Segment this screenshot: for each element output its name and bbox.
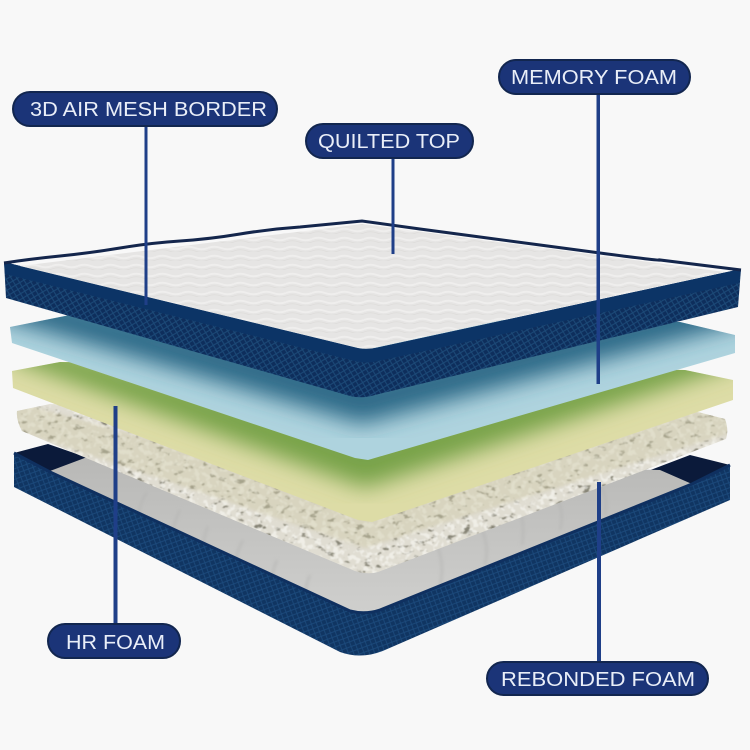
mesh side wall [14, 453, 730, 656]
leader line: memory foam [596, 93, 600, 384]
label: rebonded foam: REBONDED FOAM [501, 669, 695, 691]
back piping [4, 221, 741, 270]
rebonded foam layer [10, 400, 740, 580]
HR foam layer (green) [12, 362, 733, 522]
leader line: quilted top [392, 157, 394, 254]
quilted top mattress layer [4, 221, 741, 397]
quilted bottom panel [50, 456, 692, 612]
mesh side wall [4, 262, 741, 397]
bottom mattress cover [14, 444, 730, 656]
leader line: HR foam [114, 406, 118, 624]
memory foam layer (blue) [10, 316, 735, 460]
label: 3D air mesh border [13, 92, 277, 126]
quilted surface [20, 224, 725, 349]
olive speckled top band [10, 400, 740, 548]
interior black corners [14, 444, 100, 472]
leader line: 3D air mesh border [144, 125, 148, 305]
teal shadow [10, 316, 735, 438]
label: HR foam [48, 624, 180, 658]
label: rebonded foam [487, 662, 708, 695]
label: quilted top: QUILTED TOP [318, 131, 460, 153]
leader line: rebonded foam [597, 482, 601, 662]
label: quilted top [306, 124, 473, 158]
green shadow [12, 362, 732, 500]
solid top band [4, 262, 741, 362]
label: memory foam: MEMORY FOAM [511, 67, 677, 89]
label: HR foam: HR FOAM [66, 632, 165, 654]
label: memory foam [499, 60, 690, 94]
label: 3D air mesh border: 3D AIR MESH BORDER [30, 99, 267, 121]
